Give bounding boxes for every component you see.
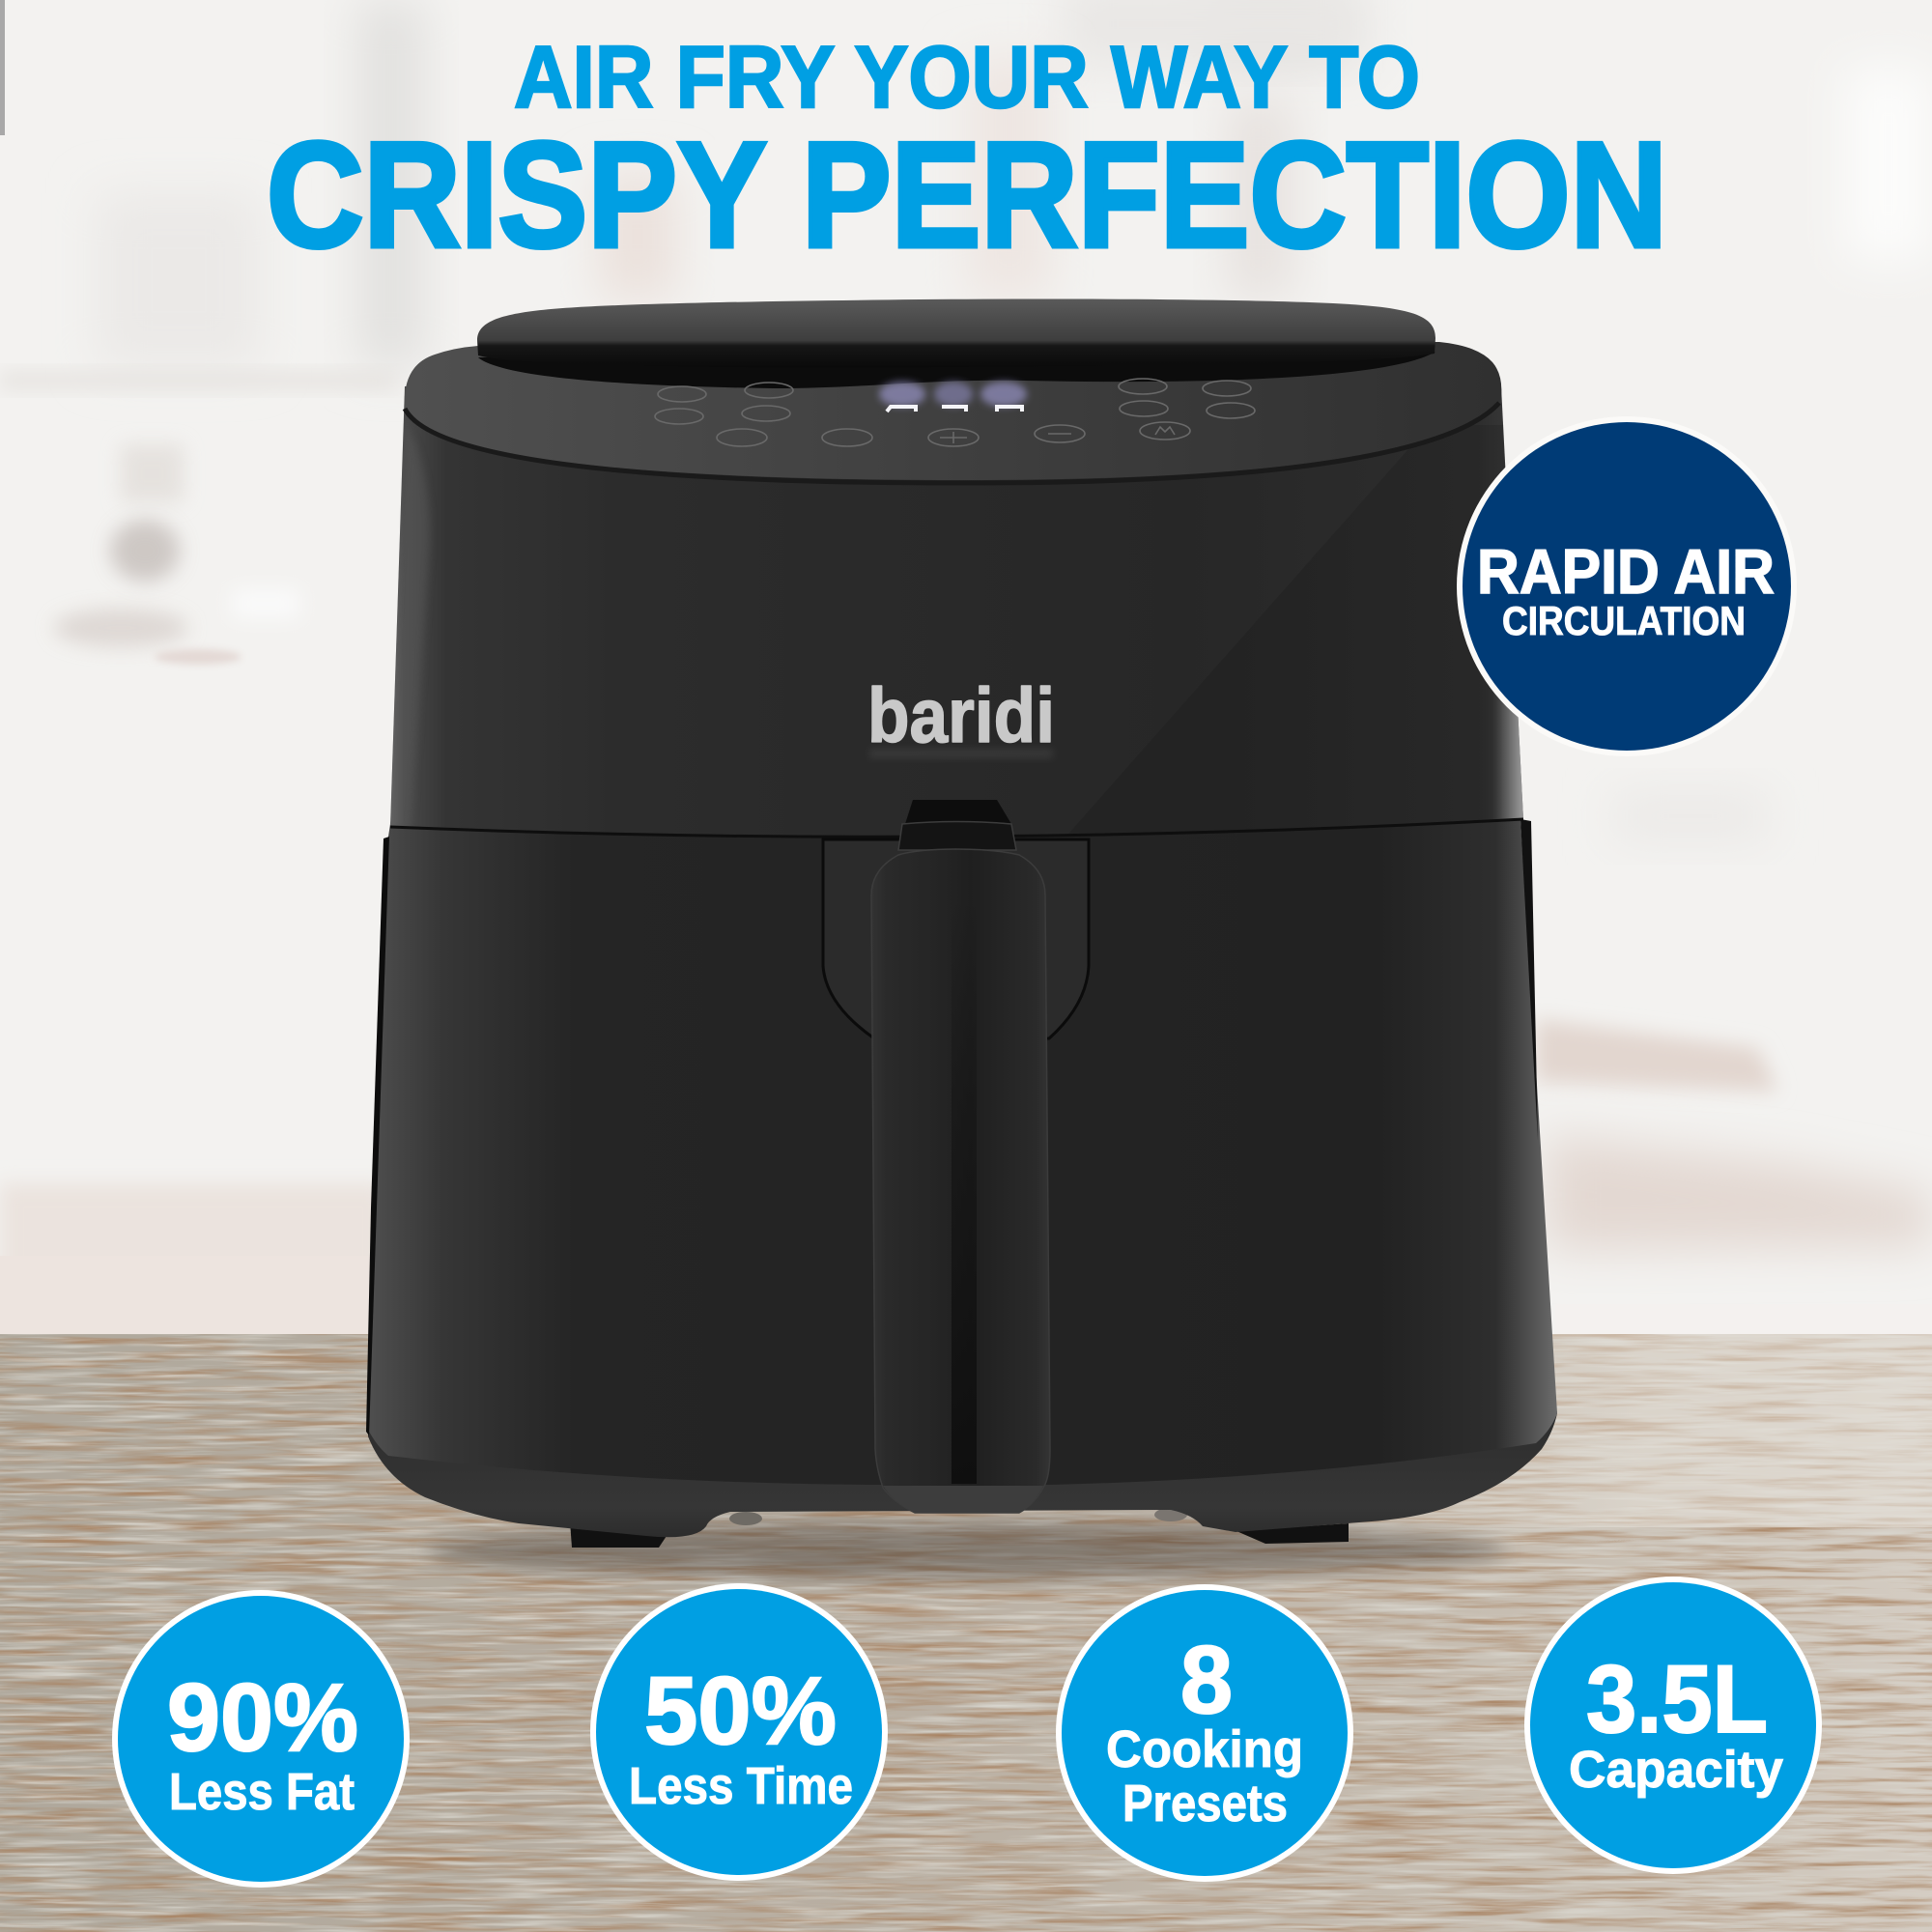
- badge: 90% less fat: Less Fat: [169, 1763, 355, 1821]
- badge: 8 cooking presets: Presets: [1122, 1775, 1288, 1833]
- top control panel: [405, 342, 1501, 480]
- wooden tabletop: [0, 1334, 1932, 1932]
- fryer upper housing: [390, 386, 1523, 837]
- badge: 3.5L capacity: Capacity: [1569, 1741, 1783, 1799]
- fryer feet: [570, 1508, 1349, 1548]
- badge: 8 cooking presets: 8: [1180, 1626, 1233, 1733]
- badge: 50% less time: 50%: [644, 1657, 837, 1764]
- badge: 8 cooking presets: Cooking: [1106, 1720, 1303, 1778]
- badge: 50% less time: Less Time: [629, 1757, 853, 1815]
- brand logo: baridi: [867, 672, 1055, 758]
- control panel display: [879, 382, 1027, 412]
- title line 2: CRISPY PERFECTION: [267, 111, 1667, 278]
- badge: 90% less fat: [112, 1590, 410, 1888]
- badge: 90% less fat: 90%: [167, 1663, 358, 1771]
- badge: rapid air circulation: RAPID AIR: [1477, 536, 1775, 607]
- handle tip: [883, 1486, 1043, 1513]
- latch button: [898, 800, 1016, 850]
- touch buttons: [655, 379, 1255, 446]
- blurred kitchen background: [0, 0, 1932, 1334]
- lid: [477, 299, 1435, 368]
- lid shadow: [478, 352, 1435, 388]
- handle bracket: [823, 839, 1089, 1038]
- badge: 3.5L capacity: [1524, 1577, 1822, 1874]
- right edge wedge: [1520, 819, 1538, 1140]
- title line 1: AIR FRY YOUR WAY TO: [514, 29, 1420, 127]
- handle centre shadow: [952, 898, 977, 1484]
- fryer lower basket: [367, 797, 1557, 1485]
- badge: 3.5L capacity: 3.5L: [1586, 1645, 1768, 1752]
- fryer base: [368, 1391, 1557, 1537]
- title: [267, 29, 1667, 278]
- housing reflection: [386, 425, 1546, 840]
- basket handle: [871, 849, 1050, 1513]
- badge: rapid air circulation: CIRCULATION: [1502, 598, 1746, 643]
- seam line: [390, 819, 1523, 837]
- air fryer product: [366, 299, 1557, 1548]
- badge: 50% less time: [590, 1583, 888, 1881]
- panel lower rim: [405, 403, 1499, 483]
- left edge wedge: [366, 837, 389, 1435]
- badge: rapid air circulation: [1457, 416, 1797, 756]
- badge: 8 cooking presets: [1056, 1584, 1353, 1882]
